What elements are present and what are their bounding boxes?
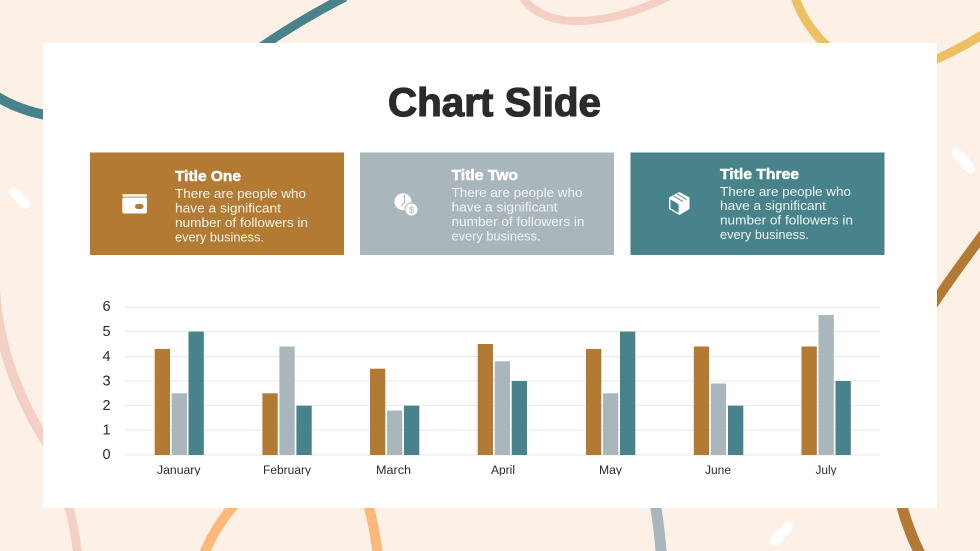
x axis labels bbox=[157, 465, 836, 476]
text block: There are people who bbox=[452, 185, 582, 200]
text block: have a significant bbox=[175, 200, 281, 216]
y axis labels: 2 bbox=[102, 398, 111, 414]
text block: number of followers in bbox=[175, 215, 308, 230]
text block bbox=[720, 184, 853, 242]
y axis labels: 5 bbox=[102, 324, 111, 340]
text block bbox=[175, 186, 308, 244]
text block: every business. bbox=[175, 230, 264, 244]
text block bbox=[452, 185, 584, 244]
bar chart bbox=[102, 299, 880, 477]
y axis labels bbox=[102, 299, 111, 463]
text block: number of followers in bbox=[452, 214, 584, 229]
series: grey bars bbox=[172, 315, 834, 455]
main panel bbox=[43, 43, 937, 508]
text block: There are people who bbox=[175, 186, 306, 201]
y axis labels: 1 bbox=[102, 422, 111, 438]
icon: credit card bbox=[122, 194, 147, 214]
x axis labels: February bbox=[263, 465, 311, 477]
panel: title one bbox=[90, 152, 344, 255]
heading: Title Two bbox=[452, 167, 518, 184]
x axis labels: July bbox=[816, 465, 837, 477]
x axis labels: January bbox=[157, 465, 201, 477]
text block: have a significant bbox=[452, 200, 558, 214]
series: teal bars bbox=[188, 332, 851, 455]
x axis labels: May bbox=[599, 465, 622, 477]
y axis labels: 6 bbox=[102, 299, 111, 315]
text block: have a significant bbox=[720, 198, 826, 213]
x axis labels: June bbox=[705, 465, 731, 477]
title: Chart Slide bbox=[388, 81, 601, 125]
heading: Title One bbox=[175, 168, 241, 185]
x axis labels: April bbox=[491, 465, 515, 477]
panel: title three bbox=[630, 152, 884, 255]
text block: number of followers in bbox=[720, 212, 853, 228]
panel: title two bbox=[360, 152, 614, 255]
text block: There are people who bbox=[720, 184, 851, 199]
icon: box bbox=[669, 192, 690, 215]
y axis labels: 4 bbox=[102, 349, 111, 365]
y axis labels: 3 bbox=[102, 374, 111, 390]
decorative white dashes bbox=[14, 153, 970, 541]
icon: clock and coin bbox=[394, 193, 418, 216]
x axis labels: March bbox=[376, 465, 411, 477]
heading: Title Three bbox=[720, 166, 799, 183]
icon: clock and coin: $ bbox=[409, 205, 415, 216]
y axis labels: 0 bbox=[102, 447, 111, 463]
text block: every business. bbox=[452, 228, 540, 244]
text block: every business. bbox=[720, 227, 809, 242]
series: brown bars bbox=[155, 344, 817, 455]
